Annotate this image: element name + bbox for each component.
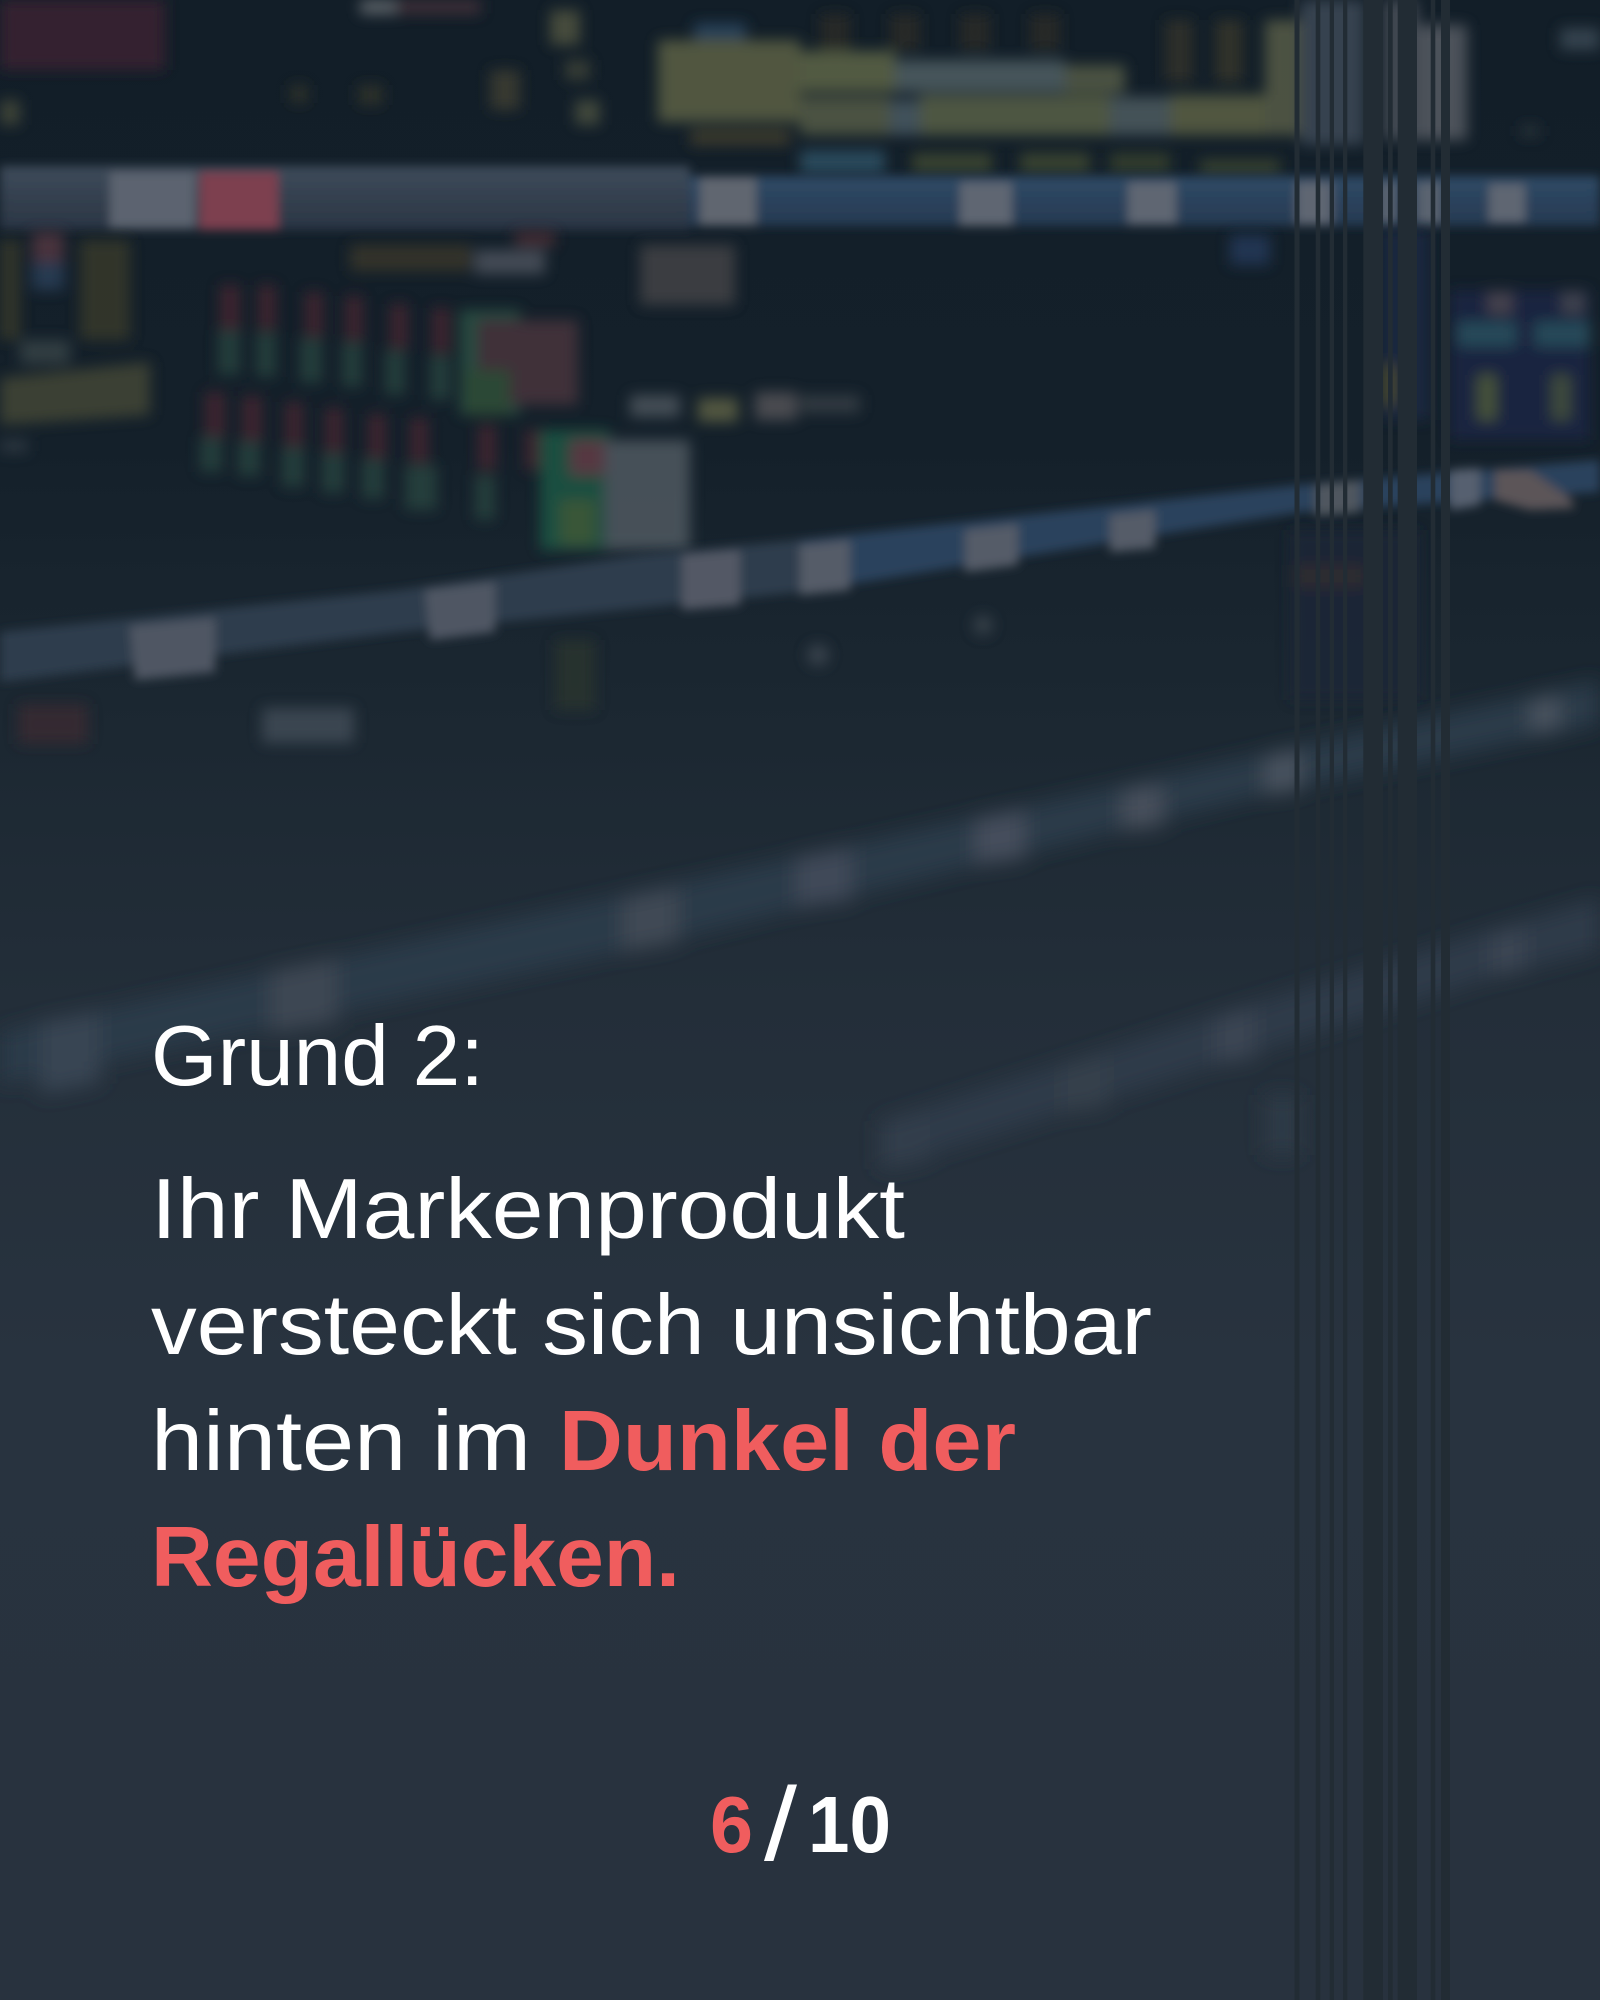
third shelf edge with price tags [0, 680, 1600, 1094]
top shelf products [0, 0, 1600, 174]
first shelf edge with price tags [0, 166, 1600, 230]
highlighted phrase: Regallücken. [151, 1510, 680, 1605]
page counter: 6 [710, 1780, 753, 1869]
page counter: / [764, 1767, 797, 1883]
fourth shelf edge [880, 898, 1600, 1170]
page counter [710, 1767, 891, 1883]
highlighted phrase [151, 1394, 1016, 1605]
heading: Grund 2: Grund 2: [151, 1009, 484, 1104]
main statement: versteckt sich unsichtbar [151, 1278, 1152, 1373]
main statement [151, 1162, 1152, 1605]
highlighted phrase: Dunkel der [559, 1394, 1016, 1489]
decorative vertical barcode stripes [1294, 0, 1450, 2000]
main statement: Ihr Markenprodukt [151, 1162, 905, 1257]
second shelf edge with price tags [0, 460, 1600, 682]
second shelf products [0, 230, 1590, 550]
lower shelf details [18, 530, 1420, 744]
main statement: hinten im [151, 1394, 531, 1489]
page counter: 10 [808, 1780, 891, 1869]
